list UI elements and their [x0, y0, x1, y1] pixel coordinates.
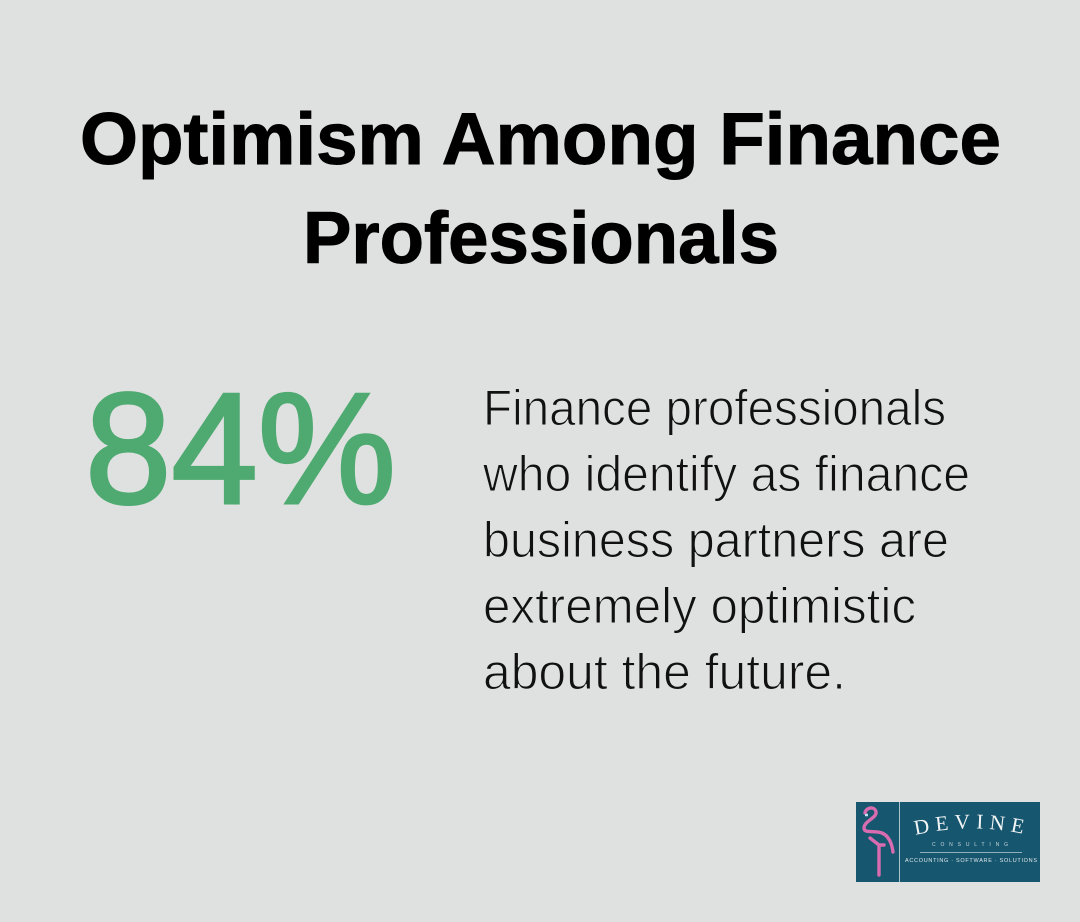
big statistic: 84%: 84%	[85, 361, 396, 537]
icon: flamingo	[864, 808, 893, 875]
description text	[482, 380, 970, 700]
logo: Devine Consulting	[856, 802, 1040, 882]
logo: Devine Consulting: CONSULTING	[932, 842, 1008, 848]
description text: extremely optimistic	[483, 578, 916, 634]
logo: Devine Consulting: ACCOUNTING · SOFTWARE · SOLUTIONS	[905, 858, 1037, 864]
logo: Devine Consulting: DEVINE	[913, 814, 1024, 835]
description text: who identify as finance	[482, 446, 970, 502]
description text: about the future.	[483, 644, 846, 700]
title: Optimism Among Finance	[80, 99, 1001, 180]
logo wordmark	[904, 828, 1040, 838]
title	[80, 99, 1001, 279]
description text: Finance professionals	[483, 380, 946, 436]
description text: business partners are	[483, 512, 949, 568]
title: Professionals	[303, 198, 779, 279]
